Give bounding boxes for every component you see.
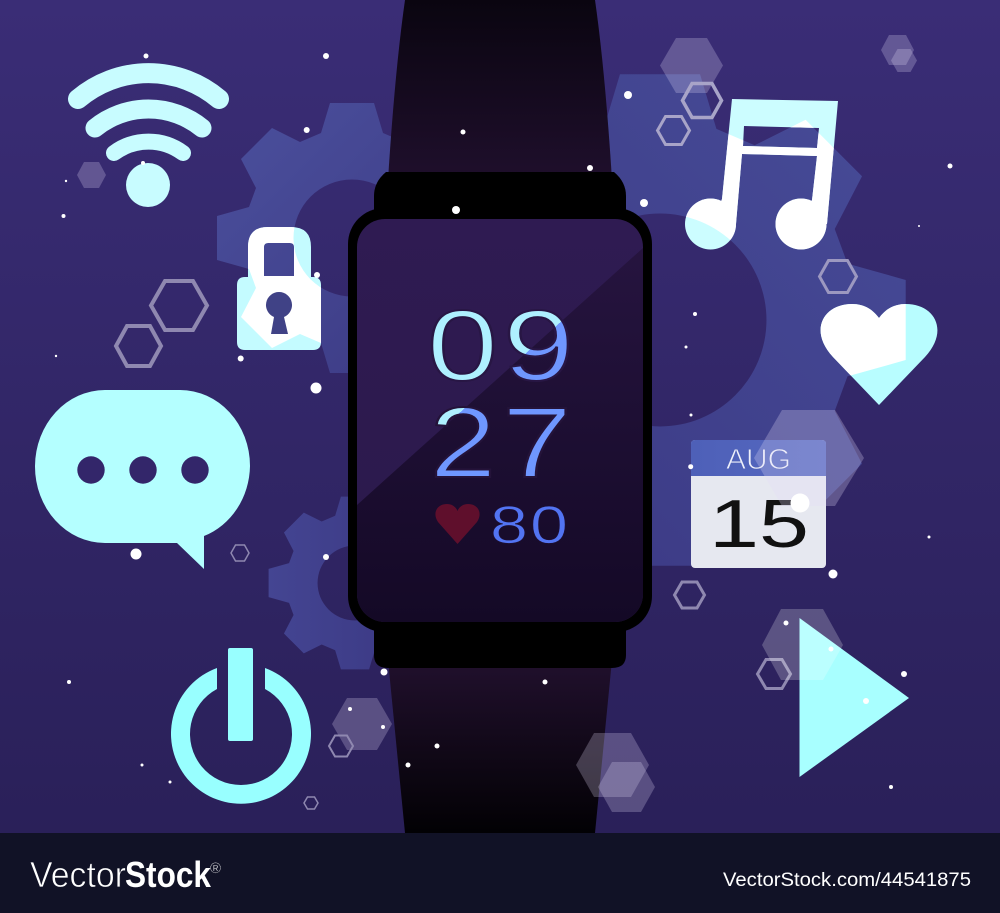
time: hours [427, 290, 574, 402]
gear: lower left [269, 497, 441, 669]
icon: calendar [691, 440, 826, 568]
bottom strap [388, 660, 612, 833]
calendar month: AUG [726, 444, 791, 476]
heart rate value [490, 496, 568, 555]
icon: heart rate heart [435, 504, 480, 544]
top lug [374, 172, 626, 225]
icon: chat bubble [35, 390, 250, 569]
icon: padlock [237, 227, 321, 350]
calendar day: 15 [709, 486, 809, 562]
top strap [388, 0, 612, 180]
heart rate value: 0 [530, 496, 568, 555]
icon: music note [685, 99, 838, 250]
icon: wifi [78, 73, 219, 207]
icon: heart [821, 304, 937, 405]
footer logo: ® [210, 860, 221, 877]
footer logo [30, 854, 221, 895]
filled hexagons [77, 35, 917, 812]
smartwatch [348, 172, 652, 668]
hexagon over play triangle [762, 609, 843, 680]
time: minutes [430, 387, 572, 499]
time: minutes: 2 [430, 387, 496, 499]
footer logo: Stock [125, 854, 212, 895]
gear: upper left [217, 103, 487, 373]
bottom lug [374, 620, 626, 668]
outlined hexagons [116, 84, 856, 809]
time: hours: 9 [503, 290, 574, 402]
icon: power button [171, 648, 311, 804]
time: minutes: 7 [502, 387, 572, 499]
heart rate value: 8 [490, 496, 528, 555]
hexagon over calendar [754, 410, 864, 506]
screen [357, 219, 643, 622]
watch case [348, 208, 652, 632]
sparkle dots [55, 53, 953, 789]
footer logo: Vector [30, 854, 126, 895]
time: hours: 0 [427, 290, 498, 402]
watch straps [388, 0, 612, 833]
icon: play triangle [800, 618, 909, 777]
gear: large right [414, 74, 906, 566]
footer bar [0, 833, 1000, 913]
footer image id: VectorStock.com/44541875 [723, 869, 971, 891]
